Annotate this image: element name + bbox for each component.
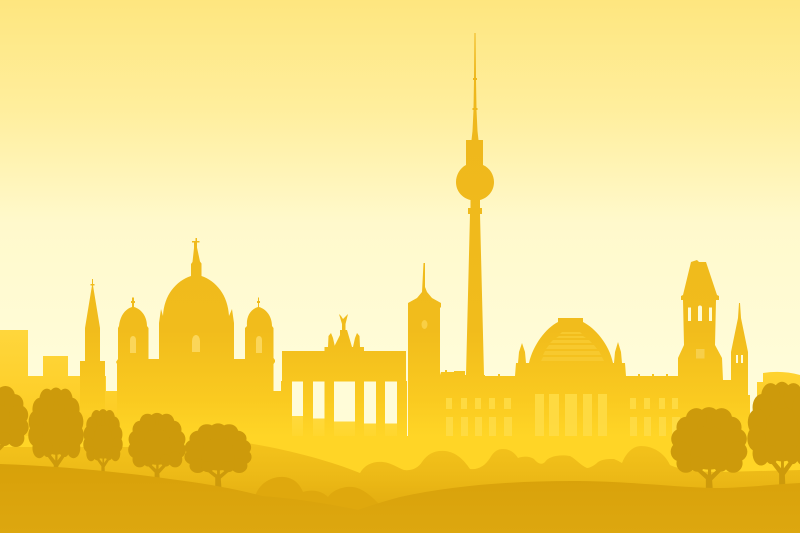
Berlin Cathedral — [116, 238, 275, 440]
quadriga horses — [328, 333, 360, 347]
right foreground hill — [300, 481, 800, 533]
church spire left — [80, 279, 105, 410]
Reichstag and main body — [441, 318, 678, 445]
tree 3 — [83, 409, 123, 480]
filler between cathedral and gate — [273, 391, 283, 441]
tree 5 — [184, 423, 252, 491]
tree 4 — [128, 413, 186, 487]
left foreground hill — [0, 464, 450, 533]
Red Town Hall — [408, 263, 441, 445]
TV Tower — [456, 33, 494, 400]
trees — [0, 382, 800, 496]
fog through Brandenburg Gate columns — [292, 416, 397, 436]
tree 2 — [28, 388, 84, 483]
cathedral windows — [130, 335, 262, 353]
Town Hall clock — [422, 320, 428, 329]
skyline — [80, 33, 750, 445]
tree 6 — [671, 407, 747, 496]
Kaiser Wilhelm church clock — [696, 349, 704, 358]
middle hill and bushes — [0, 443, 800, 533]
tree 7 — [747, 382, 800, 495]
Reichstag windows and columns — [446, 394, 680, 437]
Reichstag dome ribs — [541, 332, 604, 361]
foggy ground band — [0, 436, 800, 506]
Brandenburg Gate — [281, 314, 407, 445]
front bushes — [250, 477, 400, 533]
distant city blocks — [0, 330, 800, 450]
tree 1 — [0, 385, 29, 469]
Kaiser Wilhelm church tower — [675, 260, 750, 445]
